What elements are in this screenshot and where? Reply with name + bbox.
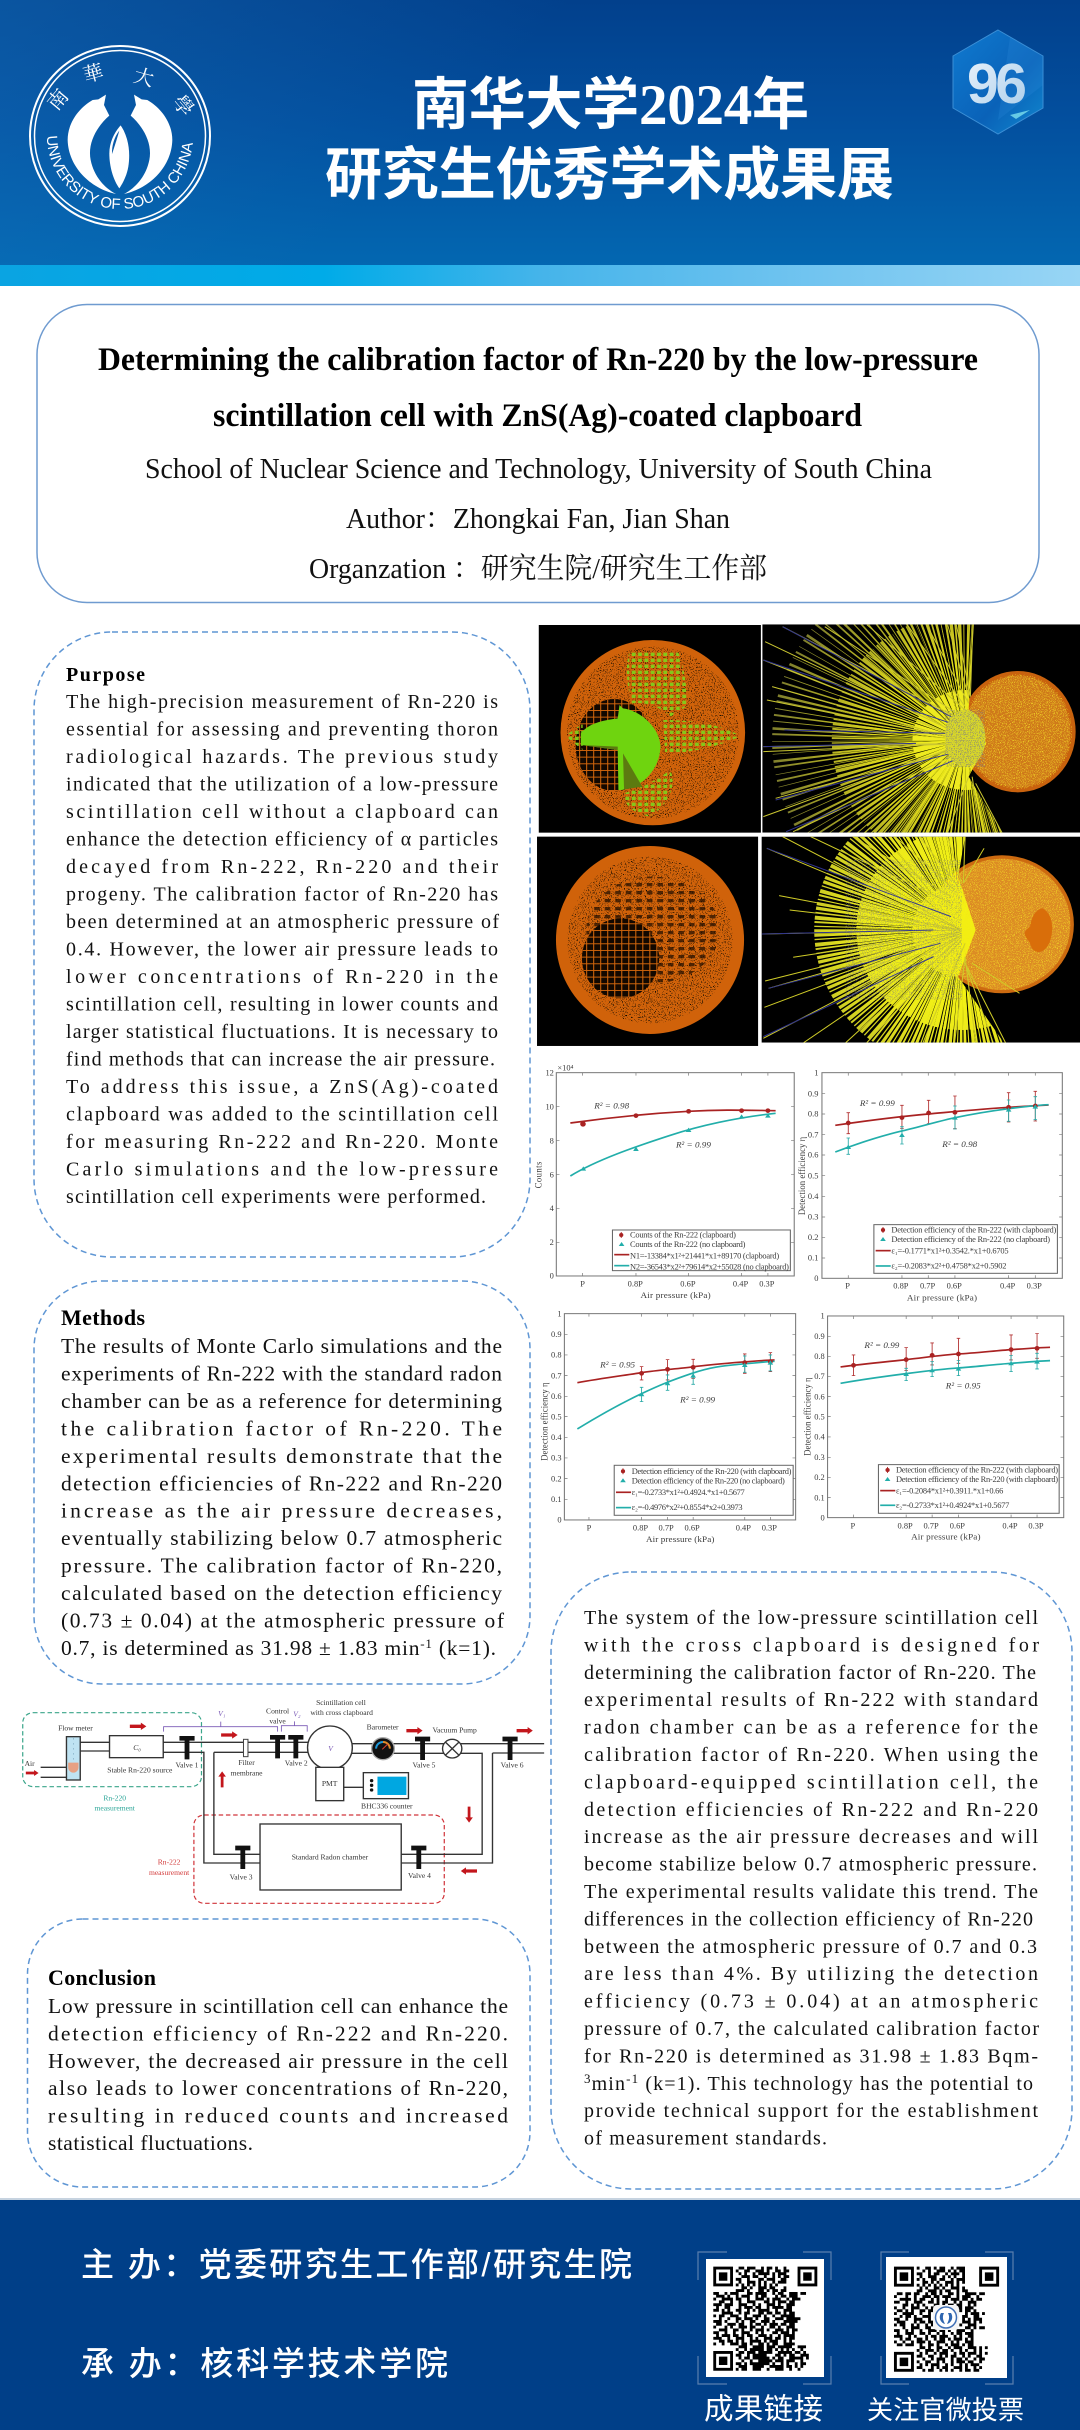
chart: Rn-222 vs Rn-220 with clapboard: 0.7P — [923, 1521, 939, 1530]
chart: Rn-222 detection efficiency: 0.5 — [808, 1172, 818, 1180]
diagram labels: Valve 1 — [176, 1760, 199, 1769]
legend: Counts of the Rn-222 (no clapboard) — [630, 1240, 746, 1249]
diagram labels: Barometer — [367, 1722, 399, 1731]
diagram labels: Valve 5 — [413, 1761, 436, 1770]
chart: Rn-220 detection efficiency: 0.6 — [551, 1392, 562, 1401]
purpose text: To address this issue, a ZnS(Ag)-coated — [66, 1076, 498, 1098]
legend: Counts of the Rn-222 (clapboard) — [630, 1231, 736, 1240]
chart: Rn-222 counts: ×10⁴ — [557, 1064, 574, 1073]
poster title: scintillation cell with ZnS(Ag)-coated clapboard — [213, 398, 862, 434]
diagram labels: V₁ — [218, 1709, 226, 1718]
methods text: the calibration factor of Rn-220. The — [61, 1416, 502, 1440]
QR code: results link — [698, 2252, 831, 2384]
icon: university logo: 華 — [79, 55, 106, 88]
discussion text: calibration factor of Rn-220. When using the — [584, 1744, 1038, 1766]
chart: Rn-222 counts: 0 — [550, 1272, 554, 1281]
chart: Rn-220 detection efficiency: 0.2 — [551, 1474, 562, 1483]
purpose text: decayed from Rn-222, Rn-220 and their — [66, 856, 498, 878]
methods text: increase as the air pressure decreases, — [61, 1499, 502, 1523]
legend: Detection efficiency of the Rn-222 (with clapboard) — [891, 1226, 1057, 1235]
purpose text: Carlo simulations and the low-pressure — [66, 1158, 498, 1180]
diagram labels: Flow meter — [58, 1724, 93, 1733]
poster title — [98, 342, 978, 434]
diagram labels: measurement — [149, 1868, 190, 1877]
legend — [614, 1465, 793, 1515]
volume brackets — [164, 1721, 307, 1732]
chart: Rn-222 vs Rn-220 with clapboard: R² = 0.95 — [945, 1381, 981, 1390]
discussion text: detection efficiencies of Rn-222 and Rn-220 — [584, 1799, 1038, 1821]
chart: Rn-222 detection efficiency: 0.3 — [808, 1213, 818, 1222]
chart: Rn-222 counts: 4 — [550, 1204, 554, 1213]
chart: Rn-220 detection efficiency: R² = 0.95 — [599, 1360, 636, 1369]
chart: Rn-220 detection efficiency: 0.3 — [551, 1454, 562, 1463]
conclusion text: also leads to lower concentrations of Rn-220, — [48, 2076, 508, 2100]
diagram labels: Control — [266, 1706, 289, 1715]
diagram labels: Valve 3 — [230, 1872, 253, 1881]
chart: Rn-222 counts: Counts — [533, 1161, 544, 1188]
chart: Rn-220 detection efficiency: 0.1 — [551, 1495, 562, 1504]
chart: Rn-222 counts: 0.4P — [733, 1280, 749, 1289]
discussion text: (k=1). This technology has the potential to — [639, 2073, 1033, 2095]
chart: Rn-222 counts: R² = 0.99 — [675, 1140, 711, 1150]
chart: Rn-220 detection efficiency: 0.4 — [551, 1433, 562, 1442]
chart: Rn-222 counts: P — [580, 1280, 585, 1289]
diagram labels: Vacuum Pump — [432, 1725, 477, 1734]
chart: Rn-222 detection efficiency: Detection efficiency η — [797, 1136, 807, 1215]
chart: Rn-220 detection efficiency: 0.9 — [551, 1330, 562, 1339]
organizers — [81, 2246, 632, 2382]
chart: Rn-222 vs Rn-220 with clapboard: 0.8P — [898, 1521, 913, 1530]
purpose text: 0.4. However, the lower air pressure leads to — [66, 938, 498, 960]
QR captions: 关注官微投票 — [867, 2390, 1024, 2427]
diagram labels: Rn-220 — [103, 1793, 126, 1802]
methods text: eventually stabilizing below 0.7 atmospheric — [61, 1526, 502, 1550]
diagram labels: membrane — [231, 1768, 263, 1777]
chart: Rn-220 detection efficiency: 0 — [557, 1516, 562, 1525]
conclusion text: However, the decreased air pressure in the cell — [48, 2049, 508, 2073]
discussion text: min — [592, 2073, 625, 2095]
conclusion text — [48, 1994, 508, 2155]
discussion text: with the cross clapboard is designed for — [584, 1634, 1039, 1656]
simulation: rays through clapboard cell — [762, 624, 1080, 833]
panel: methods — [34, 1281, 530, 1684]
title: 研究生优秀学术成果展 — [325, 144, 894, 207]
methods text: (k=1). — [433, 1636, 496, 1660]
diagram labels: valve — [269, 1716, 286, 1725]
chart: Rn-222 detection efficiency: 0.8P — [893, 1282, 909, 1291]
diagram labels: Valve 6 — [501, 1760, 524, 1769]
chart: Rn-222 detection efficiency: 0.4P — [1000, 1282, 1016, 1291]
discussion text: increase as the air pressure decreases and will — [584, 1826, 1038, 1848]
chart: Rn-222 detection efficiency: 0.8 — [808, 1110, 818, 1119]
purpose text: enhance the detection efficiency of α particles — [66, 828, 498, 850]
chart: Rn-222 detection efficiency: 0.7 — [808, 1131, 818, 1139]
discussion text: between the atmospheric pressure of 0.7 and 0.3 — [584, 1936, 1037, 1958]
chart: Rn-222 vs Rn-220 with clapboard — [803, 1312, 1064, 1542]
diagram labels: Stable Rn-220 source — [107, 1766, 173, 1775]
legend: Detection efficiency of the Rn-222 (no clapboard) — [891, 1235, 1050, 1244]
filter membrane — [243, 1739, 248, 1757]
chart: Rn-220 detection efficiency: 0.5 — [551, 1412, 562, 1421]
chart: Rn-222 vs Rn-220 with clapboard: 0.6 — [814, 1392, 825, 1401]
title — [325, 74, 894, 207]
chart: Rn-222 counts: Air pressure (kPa) — [641, 1290, 711, 1300]
affiliation and authors: Organzation ：研究生院/研究生工作部 — [309, 552, 767, 585]
diagram labels: BHC336 counter — [361, 1801, 413, 1810]
discussion text: radon chamber can be as a reference for the — [584, 1717, 1038, 1739]
conclusion text: Low pressure in scintillation cell can enhance the — [48, 1994, 508, 2018]
valves — [179, 1735, 518, 1869]
chart: Rn-222 detection efficiency: 0.9 — [808, 1090, 818, 1098]
chart: Rn-220 detection efficiency: 0.3P — [762, 1524, 777, 1533]
simulation images — [537, 624, 1080, 1046]
legend: ε₁=-0.2733*x1²+0.4924.*x1+0.5677 — [632, 1488, 745, 1497]
affiliation and authors: School of Nuclear Science and Technology, University of South China — [145, 453, 932, 485]
purpose text: larger statistical fluctuations. It is necessary to — [66, 1021, 498, 1043]
discussion text: The system of the low-pressure scintillation cell — [584, 1607, 1038, 1629]
chart: Rn-222 vs Rn-220 with clapboard: 0.3P — [1028, 1521, 1044, 1530]
diagram labels: Scintillation cell — [316, 1698, 366, 1707]
poster title: Determining the calibration factor of Rn-220 by the low-pressure — [98, 342, 978, 378]
legend — [874, 1225, 1057, 1273]
diagram labels: Standard Radon chamber — [292, 1852, 369, 1861]
chart: Rn-220 detection efficiency — [539, 1309, 796, 1544]
chart: Rn-222 vs Rn-220 with clapboard: R² = 0.99 — [863, 1340, 900, 1350]
diagram labels: Filter — [238, 1758, 255, 1767]
discussion text: are less than 4%. By utilizing the detection — [584, 1963, 1038, 1985]
methods text: experiments of Rn-222 with the standard radon — [61, 1362, 502, 1386]
chart: Rn-220 detection efficiency: Detection efficiency η — [539, 1382, 550, 1461]
chart: Rn-222 counts: 6 — [550, 1171, 554, 1179]
discussion text: for Rn-220 is determined as 31.98 ± 1.83 Bqm- — [584, 2045, 1038, 2067]
discussion text: The experimental results validate this trend. The — [584, 1881, 1038, 1903]
purpose text: The high-precision measurement of Rn-220 is — [66, 691, 498, 713]
purpose text: lower concentrations of Rn-220 in the — [66, 966, 498, 988]
simulation: dense rays image — [762, 837, 1080, 1043]
chart: Rn-222 detection efficiency: 0.3P — [1027, 1282, 1042, 1291]
chart: Rn-222 counts: 0.6P — [680, 1280, 696, 1289]
diagram labels: PMT — [322, 1779, 338, 1788]
methods text: chamber can be as a reference for determining — [61, 1389, 502, 1413]
chart: Rn-222 counts: 12 — [545, 1069, 554, 1077]
legend: ε₂=-0.2083*x2²+0.4758*x2+0.5902 — [891, 1261, 1007, 1270]
legend: ε₁=-0.1771*x1²+0.3542.*x1+0.6705 — [891, 1246, 1009, 1255]
simulation: sphere with green clapboard — [539, 625, 761, 833]
methods text: 0.7, is determined as 31.98 ± 1.83 min — [61, 1636, 420, 1660]
chart: Rn-222 counts: 2 — [550, 1238, 554, 1247]
diagram labels: with cross clapboard — [310, 1708, 373, 1717]
legend: N2=-36543*x2²+79614*x2+55028 (no clapboard) — [630, 1262, 789, 1271]
conclusion text: detection efficiency of Rn-222 and Rn-220. — [48, 2021, 508, 2045]
chart: Rn-222 detection efficiency: 0 — [814, 1274, 818, 1283]
diagram labels: measurement — [95, 1804, 136, 1813]
discussion text: provide technical support for the establishment — [584, 2100, 1038, 2122]
purpose text: clapboard was added to the scintillation cell — [66, 1104, 498, 1126]
chart: Rn-222 counts: R² = 0.98 — [593, 1101, 630, 1111]
chart: Rn-222 counts: 0.3P — [759, 1280, 775, 1289]
chart: Rn-222 counts: 8 — [550, 1137, 554, 1145]
legend: Detection efficiency of the Rn-220 (with clapboard) — [896, 1475, 1058, 1484]
icon: small university logo in QR code — [933, 2305, 959, 2330]
discussion text: become stabilize below 0.7 atmospheric pressure. — [584, 1854, 1037, 1876]
icon: counter screen — [370, 1777, 406, 1795]
purpose text: indicated that the utilization of a low-pressure — [66, 774, 498, 796]
legend: Detection efficiency of the Rn-222 (with clapboard) — [896, 1466, 1058, 1475]
legend — [612, 1230, 790, 1271]
badge: number 96 — [953, 30, 1043, 134]
chart: Rn-222 vs Rn-220 with clapboard: 0.1 — [814, 1493, 825, 1502]
legend: ε₁=-0.2084*x1²+0.3911.*x1+0.66 — [896, 1486, 1003, 1495]
chart: Rn-220 detection efficiency: 0.8 — [551, 1351, 562, 1360]
discussion text: clapboard-equipped scintillation cell, the — [584, 1771, 1038, 1793]
chart: Rn-220 detection efficiency: 0.4P — [736, 1524, 751, 1533]
conclusion text: statistical fluctuations. — [48, 2131, 253, 2155]
purpose text: scintillation cell without a clapboard can — [66, 801, 498, 823]
title: 南华大学2024年 — [412, 74, 809, 137]
panel: results discussion — [551, 1572, 1072, 2189]
purpose text: for measuring Rn-222 and Rn-220. Monte — [66, 1131, 498, 1153]
methods text: -1 — [420, 1636, 432, 1651]
QR code: official account voting — [881, 2252, 1013, 2384]
chart: Rn-222 detection efficiency — [797, 1069, 1062, 1302]
purpose text: radiological hazards. The previous study — [66, 746, 498, 768]
discussion text: of measurement standards. — [584, 2128, 827, 2150]
purpose text: scintillation cell experiments were performed. — [66, 1186, 486, 1208]
chart: Rn-222 vs Rn-220 with clapboard: P — [850, 1521, 856, 1530]
methods text: pressure. The calibration factor of Rn-220, — [61, 1554, 502, 1578]
chart: Rn-222 detection efficiency: P — [845, 1282, 850, 1291]
heading: methods: Methods — [61, 1305, 145, 1330]
methods text: detection efficiencies of Rn-222 and Rn-220 — [61, 1471, 502, 1495]
icon: university logo: 學 — [167, 88, 202, 122]
chart: Rn-220 detection efficiency: R² = 0.99 — [679, 1395, 716, 1404]
discussion text: experimental results of Rn-222 with standard — [584, 1689, 1038, 1711]
methods text: The results of Monte Carlo simulations and the — [61, 1334, 502, 1358]
diagram: measurement system schematic — [23, 1698, 544, 1903]
chart: Rn-222 vs Rn-220 with clapboard: 0.2 — [814, 1473, 825, 1482]
methods text: experimental results demonstrate that the — [61, 1444, 502, 1468]
icon: flow meter — [66, 1737, 80, 1780]
chart: Rn-222 counts: 10 — [545, 1103, 554, 1111]
chart: Rn-220 detection efficiency: 0.6P — [685, 1524, 700, 1533]
discussion text: pressure of 0.7, the calculated calibration factor — [584, 2018, 1039, 2040]
chart: Rn-222 vs Rn-220 with clapboard: 0 — [821, 1513, 825, 1522]
chart: Rn-222 counts: 0.8P — [628, 1280, 643, 1289]
discussion text: determining the calibration factor of Rn-220. The — [584, 1662, 1036, 1684]
chart: Rn-222 detection efficiency: 0.6 — [808, 1151, 818, 1160]
diagram labels — [25, 1698, 524, 1881]
icon: vacuum pump — [443, 1739, 462, 1758]
purpose text: scintillation cell, resulting in lower counts and — [66, 994, 498, 1016]
chart: Rn-222 vs Rn-220 with clapboard: 0.3 — [814, 1453, 825, 1462]
footer — [0, 2198, 1080, 2430]
chart: Rn-222 detection efficiency: Air pressure (kPa) — [907, 1293, 977, 1302]
badge: number 96: 96 — [967, 52, 1027, 116]
chart: Rn-222 vs Rn-220 with clapboard: 0.5 — [814, 1412, 825, 1421]
purpose text: progeny. The calibration factor of Rn-220 has — [66, 884, 498, 906]
chart: Rn-222 detection efficiency: 0.6P — [947, 1282, 962, 1291]
chart: Rn-222 vs Rn-220 with clapboard: 0.8 — [814, 1352, 825, 1361]
legend: ε₂=-0.2733*x1²+0.4924*x1+0.5677 — [896, 1501, 1009, 1510]
chart: Rn-222 detection efficiency: 0.2 — [808, 1233, 818, 1242]
diagram labels: V₂ — [293, 1710, 301, 1719]
diagram labels: V — [328, 1744, 334, 1753]
chart: Rn-222 vs Rn-220 with clapboard: 0.4 — [814, 1433, 825, 1442]
arrows — [26, 1723, 533, 1875]
chart: Rn-222 counts — [533, 1064, 794, 1300]
panel: conclusion — [28, 1919, 530, 2187]
header banner — [0, 0, 1080, 286]
diagram labels: Valve 2 — [285, 1759, 308, 1768]
light blue band — [0, 265, 1080, 286]
chart: Rn-222 vs Rn-220 with clapboard: 0.9 — [814, 1332, 825, 1341]
purpose text: essential for assessing and preventing thoron — [66, 718, 498, 740]
chart: Rn-222 detection efficiency: 0.7P — [920, 1282, 936, 1291]
chart: Rn-220 detection efficiency: 0.7P — [659, 1524, 674, 1533]
simulation: sphere mesh without rays — [537, 837, 758, 1046]
icon: university logo: UNIVERSITY OF SOUTH CHINA — [47, 136, 193, 209]
methods text: calculated based on the detection efficiency — [61, 1581, 502, 1605]
legend: Detection efficiency of the Rn-220 (no clapboard) — [632, 1476, 785, 1485]
QR captions: 成果链接 — [704, 2386, 823, 2428]
chart: Rn-220 detection efficiency: Air pressure (kPa) — [646, 1534, 714, 1544]
chart: Rn-222 vs Rn-220 with clapboard: 0.6P — [950, 1521, 965, 1530]
legend: Detection efficiency of the Rn-220 (with clapboard) — [632, 1467, 792, 1476]
affiliation and authors — [145, 453, 932, 585]
diagram labels: C₀ — [133, 1743, 141, 1752]
chart: Rn-222 vs Rn-220 with clapboard: 0.7 — [814, 1372, 825, 1381]
diagram labels: Rn-222 — [158, 1858, 181, 1867]
icon: university logo: 南 — [39, 82, 74, 116]
discussion text — [584, 1607, 1039, 2150]
chart: Rn-222 detection efficiency: R² = 0.98 — [941, 1139, 978, 1149]
chart: Rn-220 detection efficiency: 1 — [557, 1309, 562, 1318]
methods text: (0.73 ± 0.04) at the atmospheric pressure of — [61, 1608, 505, 1632]
chart: Rn-220 detection efficiency: 0.7 — [551, 1371, 562, 1380]
affiliation and authors: Author：Zhongkai Fan, Jian Shan — [346, 503, 730, 535]
legend: N1=-13384*x1²+21441*x1+89170 (clapboard) — [630, 1251, 779, 1260]
diagram labels: Air — [25, 1759, 35, 1768]
chart: Rn-220 detection efficiency: 0.8P — [633, 1524, 649, 1533]
discussion text: efficiency (0.73 ± 0.04) at an atmospheric — [584, 1991, 1038, 2013]
chart: Rn-222 detection efficiency: 0.4 — [808, 1192, 818, 1201]
chart: Rn-222 vs Rn-220 with clapboard: Air pressure (kPa) — [911, 1532, 981, 1542]
methods text — [61, 1334, 505, 1660]
discussion text: differences in the collection efficiency of Rn-220 — [584, 1908, 1033, 1930]
heading: conclusion: Conclusion — [48, 1965, 156, 1990]
QR captions — [704, 2386, 1024, 2428]
organizers: 主 办：党委研究生工作部/研究生院 — [81, 2246, 632, 2283]
purpose text: been determined at an atmospheric pressure of — [66, 911, 499, 933]
chart: Rn-222 vs Rn-220 with clapboard: Detection efficiency η — [803, 1377, 813, 1456]
purpose text: find methods that can increase the air pressure. — [66, 1048, 495, 1070]
charts — [533, 1064, 1064, 1544]
legend — [878, 1465, 1059, 1513]
heading: purpose: Purpose — [66, 664, 145, 686]
panel: title block — [37, 304, 1039, 602]
chart: Rn-222 vs Rn-220 with clapboard: 1 — [821, 1312, 825, 1321]
legend: ε₂=-0.4976*x2²+0.8554*x2+0.3973 — [632, 1503, 743, 1512]
discussion text: 3 — [584, 2071, 590, 2086]
diagram labels: Valve 4 — [408, 1871, 431, 1880]
discussion text: -1 — [626, 2071, 638, 2086]
purpose text — [66, 691, 499, 1208]
organizers: 承 办：核科学技术学院 — [81, 2345, 448, 2382]
icon: barometer — [372, 1738, 394, 1760]
chart: Rn-220 detection efficiency: P — [587, 1524, 592, 1533]
panel: purpose — [34, 632, 530, 1257]
icon: university logo — [29, 45, 211, 227]
icon: university logo: 大 — [131, 59, 158, 92]
chart: Rn-222 detection efficiency: 0.1 — [808, 1254, 818, 1263]
chart: Rn-222 detection efficiency: R² = 0.99 — [859, 1098, 895, 1108]
chart: Rn-222 detection efficiency: 1 — [814, 1069, 818, 1077]
conclusion text: resulting in reduced counts and increased — [48, 2104, 508, 2128]
chart: Rn-222 vs Rn-220 with clapboard: 0.4P — [1002, 1521, 1018, 1530]
